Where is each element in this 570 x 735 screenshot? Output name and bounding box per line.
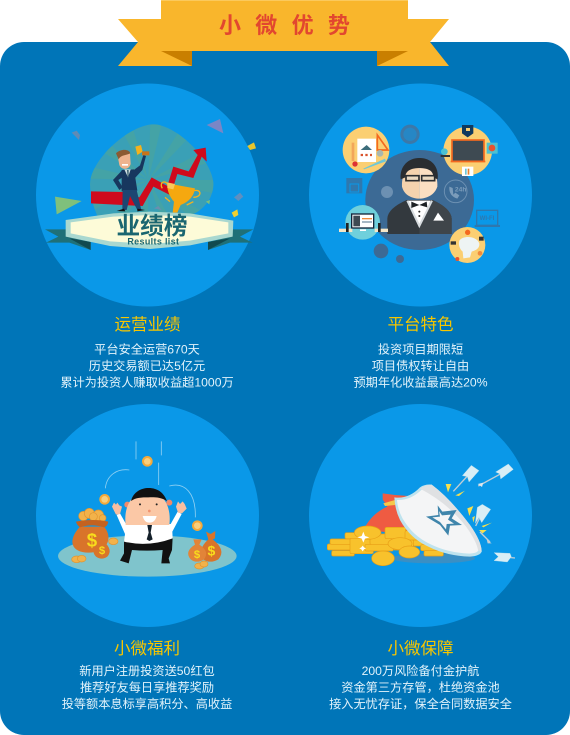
businessman (113, 145, 149, 211)
panel: welfare (36, 404, 259, 711)
body: 运营业绩: 累计为投资人赚取收益超1000万 (60, 374, 234, 390)
panel: operating results (36, 84, 259, 390)
body: 小微保障: 接入无忧存证，保全合同数据安全 (329, 696, 512, 711)
illustration: man with money bags (58, 441, 237, 577)
body: 小微保障: 资金第三方存管，杜绝资金池 (341, 680, 500, 694)
body: 小微福利: 新用户注册投资送50红包 (79, 663, 215, 678)
heading: 小微保障: 小微保障 (388, 639, 454, 658)
illustration: man with money bags: $ (207, 542, 215, 558)
body: 运营业绩: 历史交易额已达5亿元 (89, 358, 205, 373)
body: 平台特色: 项目债权转让自由 (372, 358, 469, 373)
illustration: shield with coins (327, 464, 515, 566)
title ribbon (118, 0, 449, 66)
illustration: consultant with icons: WI-FI (480, 216, 495, 222)
heading: 运营业绩: 运营业绩 (114, 315, 180, 334)
body: 平台特色 (353, 342, 488, 390)
illustration: consultant with icons (339, 125, 500, 263)
illustration: man with money bags: $ (194, 549, 201, 561)
body: 平台特色: 投资项目期限短 (378, 342, 463, 356)
illustration: man with money bags: $ (99, 545, 106, 557)
heading: 小微福利: 小微福利 (114, 639, 180, 658)
body: 平台特色: 预期年化收益最高达20% (353, 374, 488, 390)
badge heading: 业绩榜 (117, 213, 187, 240)
badge subtitle: Results list (127, 237, 179, 247)
body: 小微福利: 推荐好友每日享推荐奖励 (80, 680, 214, 694)
body: 运营业绩: 平台安全运营670天 (94, 342, 200, 356)
panel: security (309, 404, 532, 711)
body: 小微福利 (62, 663, 232, 711)
body: 小微保障: 200万风险备付金护航 (362, 663, 479, 678)
panel: platform features (309, 84, 532, 390)
body: 运营业绩 (60, 342, 234, 390)
title text: 小微优势 (219, 13, 364, 38)
body: 小微保障 (329, 663, 512, 711)
heading: 平台特色: 平台特色 (388, 315, 454, 334)
illustration: man with money bags: $ (87, 530, 98, 551)
illustration: consultant with icons: 24h (455, 186, 466, 193)
illustration: results list (45, 119, 256, 250)
body: 小微福利: 投等额本息标享高积分、高收益 (62, 696, 232, 711)
